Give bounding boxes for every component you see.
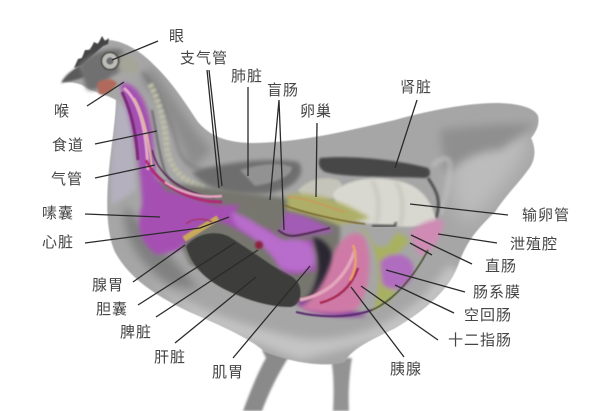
label: pancreas: 胰腺 bbox=[390, 361, 422, 378]
neck spine bbox=[142, 72, 228, 172]
comb bbox=[74, 36, 109, 68]
label: spleen: 脾脏 bbox=[120, 324, 152, 341]
heat map: right pink loops bbox=[287, 194, 444, 313]
label: liver: 肝脏 bbox=[154, 349, 186, 366]
lung bbox=[192, 160, 301, 194]
label: esophagus: 食道 bbox=[52, 137, 84, 154]
label: oviduct: 输卵管 bbox=[522, 207, 570, 224]
cloaca pale stripe bbox=[432, 159, 450, 215]
pale band behind eye bbox=[118, 54, 140, 73]
body shading bbox=[111, 66, 535, 360]
label: rectum: 直肠 bbox=[485, 258, 517, 275]
organ labels bbox=[42, 28, 570, 381]
label: ovary: 卵巢 bbox=[300, 103, 332, 120]
label: jejunum-ileum: 空回肠 bbox=[464, 307, 512, 324]
leader lines bbox=[85, 41, 508, 358]
label: heart: 心脏 bbox=[42, 234, 74, 251]
ovary lumps bbox=[298, 178, 342, 202]
label: trachea: 气管 bbox=[51, 171, 83, 188]
label: kidney: 肾脏 bbox=[400, 79, 432, 96]
liver bbox=[186, 233, 301, 307]
label: eye: 眼 bbox=[169, 28, 185, 45]
label: air sac: 嗉囊 bbox=[42, 204, 74, 222]
kidney bbox=[319, 157, 430, 178]
head dark bbox=[78, 49, 124, 90]
label: duodenum: 十二指肠 bbox=[448, 332, 512, 349]
heat map: veins bbox=[122, 88, 428, 316]
heat map: purple bbox=[120, 83, 368, 317]
label: lung: 肺脏 bbox=[231, 68, 263, 85]
spleen spot bbox=[255, 241, 263, 249]
body silhouette bbox=[62, 40, 539, 364]
wattle bbox=[97, 79, 117, 95]
label: cloaca: 泄殖腔 bbox=[510, 236, 558, 253]
label: gizzard: 肌胃 bbox=[212, 364, 244, 381]
legs bbox=[243, 350, 352, 411]
eye bbox=[102, 52, 118, 70]
label: bronchus: 支气管 bbox=[180, 50, 228, 67]
label: cecum: 盲肠 bbox=[267, 82, 299, 99]
oviduct white coils bbox=[333, 179, 436, 227]
label: mesentery: 肠系膜 bbox=[473, 284, 521, 301]
label: gallbladder: 胆囊 bbox=[96, 301, 128, 318]
cavity shadow bbox=[150, 180, 340, 305]
label: larynx: 喉 bbox=[54, 103, 70, 120]
label: proventriculus: 腺胃 bbox=[92, 277, 124, 294]
chicken anatomy illustration bbox=[61, 36, 539, 411]
beak bbox=[61, 66, 86, 83]
